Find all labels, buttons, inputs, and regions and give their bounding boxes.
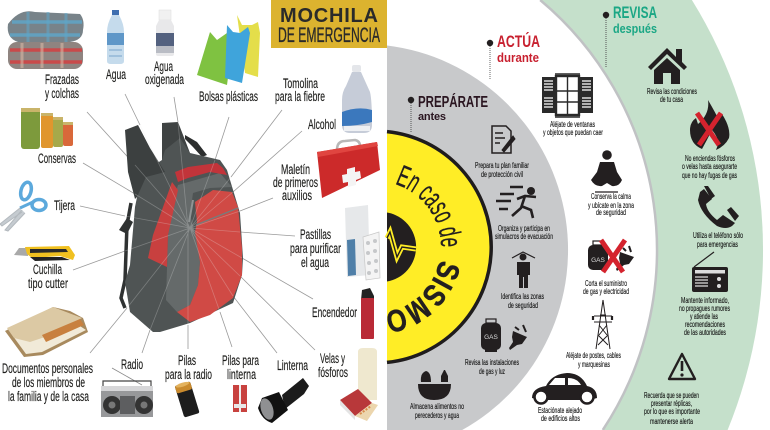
text: replicas: por lo que es importante (644, 407, 700, 416)
label: documentos (2, 361, 93, 404)
icon: safety zone person (512, 252, 535, 288)
icon: plastic bags (197, 15, 260, 85)
text: calma: de seguridad (596, 208, 626, 217)
text: informado: y atiende las (690, 312, 718, 321)
label: pastillas: el agua (301, 255, 329, 270)
text: replicas: presentar réplicas, (651, 399, 692, 408)
label: pilas radio (165, 353, 212, 382)
label: revisa: después (613, 22, 657, 36)
icon: lighter (361, 288, 374, 339)
text: condiciones: de tu casa (660, 95, 683, 104)
text: replicas (644, 391, 700, 426)
icon: hydrogen peroxide (156, 10, 174, 56)
icon: meditation (591, 150, 622, 192)
icon: battery C (174, 380, 200, 418)
text: alimentos (410, 402, 464, 420)
label: conservas: Conservas (38, 151, 76, 166)
label: documentos: Documentos personales (2, 361, 93, 376)
icon: first aid kit (317, 140, 380, 198)
label: actua (487, 32, 540, 80)
text: postes (566, 351, 621, 369)
label: tomolina (275, 76, 325, 104)
text: condiciones (647, 87, 697, 104)
text: calma: Conserva la calma (591, 192, 631, 201)
label: maletin: Maletín (281, 162, 310, 177)
panel: concentric circles (387, 0, 763, 430)
text: alimentos: perecederos y agua (415, 411, 459, 420)
icon: gas cut: GAS (591, 257, 606, 264)
label: alcohol: Alcohol (308, 117, 336, 132)
label: linterna: Linterna (277, 358, 308, 373)
text: simulacros (495, 224, 553, 241)
icon: flashlight (258, 378, 309, 423)
icon: alcohol bottle (342, 65, 372, 133)
text: replicas: mantenerse alerta (650, 417, 693, 426)
label: actua: durante (497, 51, 539, 65)
text: suministro (583, 279, 629, 296)
text: ventanas: y objetos que puedan caer (543, 128, 603, 137)
icon: electric tower (593, 300, 612, 349)
text: calma: y ubícate en la zona (588, 201, 634, 210)
text: postes: Aléjate de postes, cables (566, 351, 621, 360)
text: simulacros: Organiza y participa en (498, 224, 550, 233)
label: preparate: antes (418, 111, 446, 123)
text: informado: de las autoridades (684, 328, 726, 337)
icon: pill box (345, 205, 380, 280)
icon: food basket (418, 370, 451, 400)
label: maletin: de primeros (273, 175, 318, 190)
text: edificios: Estaciónate alejado (538, 406, 582, 415)
icon: folder documents (5, 307, 88, 357)
icon: car (532, 373, 597, 404)
label: pastillas: Pastillas (300, 227, 331, 242)
text: plan familiar: de protección civil (481, 170, 523, 179)
label: radio: Radio (121, 357, 143, 372)
label: velas (318, 351, 348, 380)
icon: runner (496, 187, 536, 218)
text: instalaciones: Revisa las instalaciones (465, 358, 519, 367)
icon: candle and matches (340, 348, 378, 421)
icon: flame no fire (690, 100, 729, 150)
label: agua oxigenada (145, 59, 184, 87)
label: pilas linterna: Pilas para (222, 353, 259, 368)
text: suministro: de gas y electricidad (583, 287, 629, 296)
label: actua: ACTÚA (497, 32, 540, 51)
label: agua oxigenada: oxigenada (145, 72, 184, 87)
label: agua: Agua (106, 67, 126, 82)
icon: window (542, 74, 593, 117)
label: tomolina: para la fiebre (275, 89, 325, 104)
text: fosforos: No enciendas fósforos (685, 154, 735, 163)
label: pilas radio: Pilas (178, 353, 196, 368)
label: pastillas (290, 227, 341, 270)
text: suministro: Corta el suministro (585, 279, 627, 288)
label: documentos: de los miembros de (12, 375, 85, 390)
label: pilas linterna: linterna (227, 367, 256, 382)
label: documentos: la familia y de la casa (8, 389, 89, 404)
text: informado: no propagues rumores (679, 304, 730, 313)
label: velas: fósforos (318, 365, 348, 380)
label: pilas linterna (222, 353, 259, 382)
icon: gas and plug: GAS (484, 334, 499, 341)
icon: plan document (492, 126, 515, 153)
label: preparate: PREPÁRATE (418, 94, 488, 111)
backpack (119, 122, 243, 332)
text: instalaciones (465, 358, 519, 376)
label: bolsas plasticas: Bolsas plásticas (199, 89, 258, 104)
text: fosforos: que no hay fugas de gas (682, 171, 737, 180)
label: cuchilla: Cuchilla (33, 262, 62, 277)
text: condiciones: Revisa las condiciones (647, 87, 697, 96)
text: instalaciones: de gas y luz (479, 367, 505, 376)
title: DE EMERGENCIA (278, 24, 380, 47)
text: edificios (538, 406, 582, 423)
text: postes: y marquesinas (578, 360, 610, 369)
text: telefono (693, 231, 743, 249)
label: frazadas: Frazadas (45, 72, 79, 87)
icon: radio (692, 252, 728, 292)
text: replicas: Recuerda que se pueden (644, 391, 699, 400)
icon: cutter (14, 246, 75, 261)
label: revisa (603, 4, 657, 68)
text: ventanas (543, 120, 603, 137)
text: edificios: de edificios altos (541, 414, 580, 423)
text: plan familiar: Prepara tu plan familiar (475, 161, 529, 170)
label: pilas radio: para la radio (165, 367, 212, 382)
icon: gas cut (588, 240, 634, 272)
label: frazadas (45, 72, 79, 101)
text: alimentos: Almacena alimentos no (410, 402, 464, 411)
label: cuchilla (28, 262, 68, 291)
label: preparate (408, 94, 488, 133)
icon: boombox (101, 368, 153, 417)
text: telefono: para emergencias (697, 240, 738, 249)
icon: house (648, 48, 687, 84)
text: fosforos: o velas hasta asegurarte (682, 162, 737, 171)
label: tijera: Tijera (54, 198, 75, 213)
text: ventanas: Aléjate de ventanas (550, 120, 595, 129)
label: agua oxigenada: Agua (154, 59, 173, 74)
icon: warning (669, 354, 695, 379)
label: pastillas: para purificar (290, 241, 341, 256)
text: informado (679, 296, 730, 337)
text: zonas: Identifica las zonas (501, 292, 544, 301)
icon: preserve jars (21, 108, 73, 149)
label: velas: Velas y (320, 351, 345, 366)
label: maletin (273, 162, 318, 203)
label: cuchilla: tipo cutter (28, 276, 68, 291)
icon: scissors (0, 181, 46, 231)
label: tomolina: Tomolina (283, 76, 318, 91)
label: revisa: REVISA (613, 4, 657, 22)
text: zonas (501, 292, 544, 310)
icon: phone (698, 186, 739, 228)
center title (387, 165, 462, 332)
icon: blankets (8, 11, 84, 69)
icon: water bottle (107, 10, 124, 64)
text: informado: recomendaciones (685, 320, 725, 329)
text: plan familiar (475, 161, 529, 179)
label: encendedor: Encendedor (312, 305, 357, 320)
title (271, 0, 387, 48)
lines over backpack (125, 122, 242, 330)
text: informado: Mantente informado, (681, 296, 729, 305)
icon: gas and plug (481, 319, 527, 352)
leader lines (73, 94, 315, 353)
label: frazadas: y colchas (45, 86, 79, 101)
icon: small batteries (233, 385, 247, 412)
text: calma (588, 192, 634, 217)
label: maletin: auxilios (282, 188, 312, 203)
text: fosforos (682, 154, 737, 180)
title: MOCHILA (280, 5, 378, 27)
text: zonas: de seguridad (508, 301, 538, 310)
text: simulacros: simulacros de evacuación (495, 232, 553, 241)
center title: SISMO (387, 262, 460, 332)
center title: En caso de (396, 165, 462, 246)
